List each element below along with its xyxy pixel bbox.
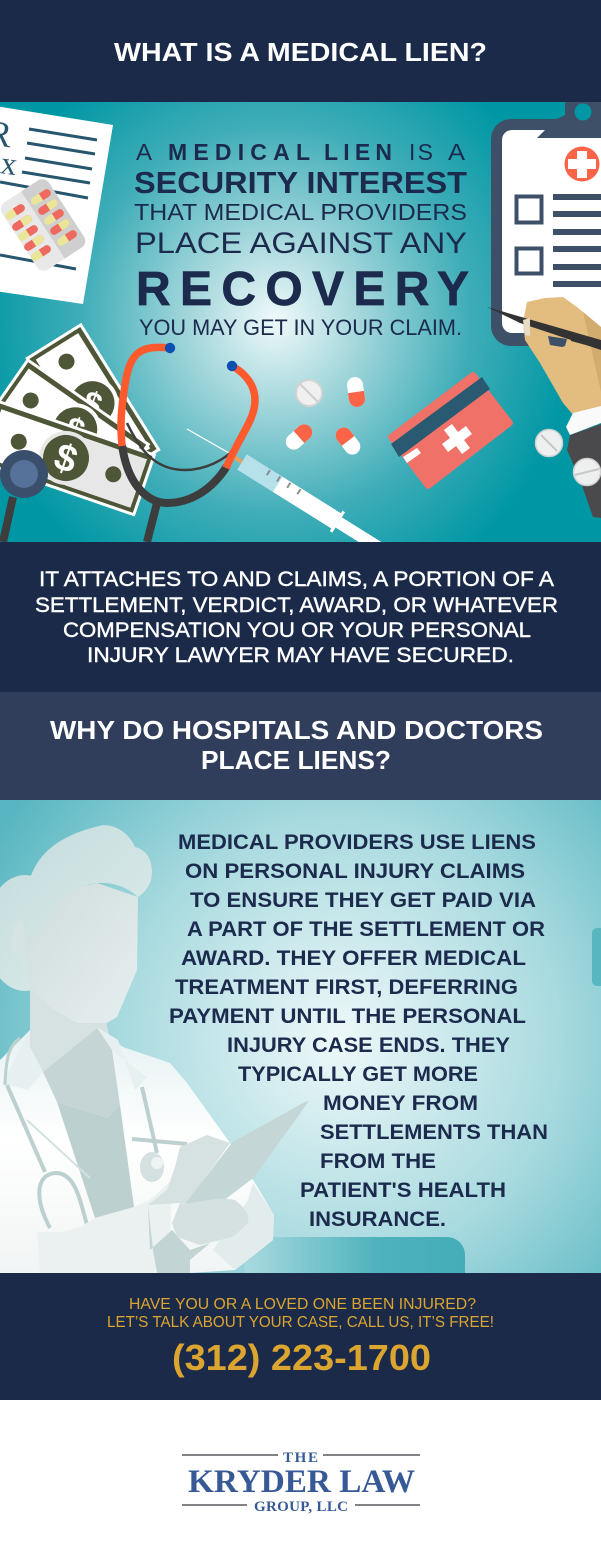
illustration: doctor — [0, 825, 307, 1273]
icon: medical card — [391, 375, 510, 486]
icon: hand with pen — [487, 297, 601, 518]
hero statement text: IS — [409, 139, 433, 165]
logo: THE — [283, 1450, 318, 1466]
icon: banknotes — [0, 323, 161, 517]
title: WHAT IS A MEDICAL LIEN? — [114, 37, 487, 67]
panel: lien explanation — [0, 542, 601, 692]
heading: WHY DO HOSPITALS AND DOCTORS — [50, 715, 543, 745]
panel: why providers use liens — [0, 800, 601, 1273]
icon: banknotes: $ — [78, 383, 107, 423]
hero statement text: LIEN — [324, 139, 392, 165]
hero statement text: A — [448, 139, 466, 165]
panel: hero illustration — [0, 96, 601, 562]
explanation text: INJURY LAWYER MAY HAVE SECURED. — [87, 644, 514, 667]
explanation text: INJURY CASE ENDS. THEY — [227, 1034, 510, 1057]
explanation text: A PART OF THE SETTLEMENT OR — [187, 918, 545, 941]
explanation text: PAYMENT UNTIL THE PERSONAL — [169, 1005, 526, 1028]
hero statement text: SECURITY INTEREST — [134, 165, 467, 200]
hero statement text — [134, 139, 469, 340]
icon: pill blister pack — [0, 176, 88, 274]
logo: KRYDER LAW — [188, 1464, 415, 1500]
explanation text: INSURANCE. — [309, 1208, 446, 1231]
hero statement text: MEDICAL — [168, 139, 310, 165]
hero statement text: THAT MEDICAL PROVIDERS — [134, 199, 467, 225]
icon: syringe — [186, 428, 382, 542]
hero statement text: A — [136, 139, 153, 165]
call to action text: HAVE YOU OR A LOVED ONE BEEN INJURED? — [129, 1296, 476, 1313]
call to action text: LET’S TALK ABOUT YOUR CASE, CALL US, IT’S FREE! — [107, 1314, 494, 1331]
explanation text: MEDICAL PROVIDERS USE LIENS — [178, 831, 536, 854]
panel: call to action — [0, 1273, 601, 1400]
explanation text: TYPICALLY GET MORE — [238, 1063, 478, 1086]
explanation text: SETTLEMENT, VERDICT, AWARD, OR WHATEVER — [35, 594, 558, 617]
explanation text: FROM THE — [320, 1150, 436, 1173]
explanation text: SETTLEMENTS THAN — [320, 1121, 548, 1144]
explanation text: COMPENSATION YOU OR YOUR PERSONAL — [63, 619, 531, 642]
heading — [50, 715, 543, 775]
title banner — [0, 0, 601, 102]
hero statement text: PLACE AGAINST ANY — [135, 227, 467, 260]
icon: pills — [282, 376, 366, 458]
icon: prescription sheet — [0, 106, 113, 304]
explanation text: TREATMENT FIRST, DEFERRING — [175, 976, 518, 999]
explanation text: TO ENSURE THEY GET PAID VIA — [190, 889, 536, 912]
call to action text — [107, 1296, 494, 1331]
panel: section heading — [0, 692, 601, 800]
heading: PLACE LIENS? — [201, 745, 391, 775]
explanation text: AWARD. THEY OFFER MEDICAL — [181, 947, 526, 970]
decorative tab — [592, 928, 601, 986]
hero statement text: YOU MAY GET IN YOUR CLAIM. — [139, 315, 462, 340]
logo: GROUP, LLC — [254, 1499, 348, 1515]
hero statement text: RECOVERY — [136, 263, 469, 316]
bottom teal bar — [245, 1237, 465, 1273]
icon: tablets right — [536, 430, 600, 486]
phone number: (312) 223-1700 — [172, 1337, 431, 1378]
explanation text: MONEY FROM — [323, 1092, 478, 1115]
explanation text: IT ATTACHES TO AND CLAIMS, A PORTION OF A — [39, 568, 554, 591]
icon: banknotes: $ — [49, 436, 83, 482]
icon: banknotes: $ — [61, 409, 90, 449]
explanation text: PATIENT'S HEALTH — [300, 1179, 506, 1202]
explanation text — [169, 831, 548, 1231]
explanation text — [35, 568, 558, 667]
logo — [182, 1450, 420, 1515]
icon: stethoscope — [0, 343, 255, 542]
explanation text: ON PERSONAL INJURY CLAIMS — [185, 860, 525, 883]
icon: clipboard — [491, 96, 601, 346]
